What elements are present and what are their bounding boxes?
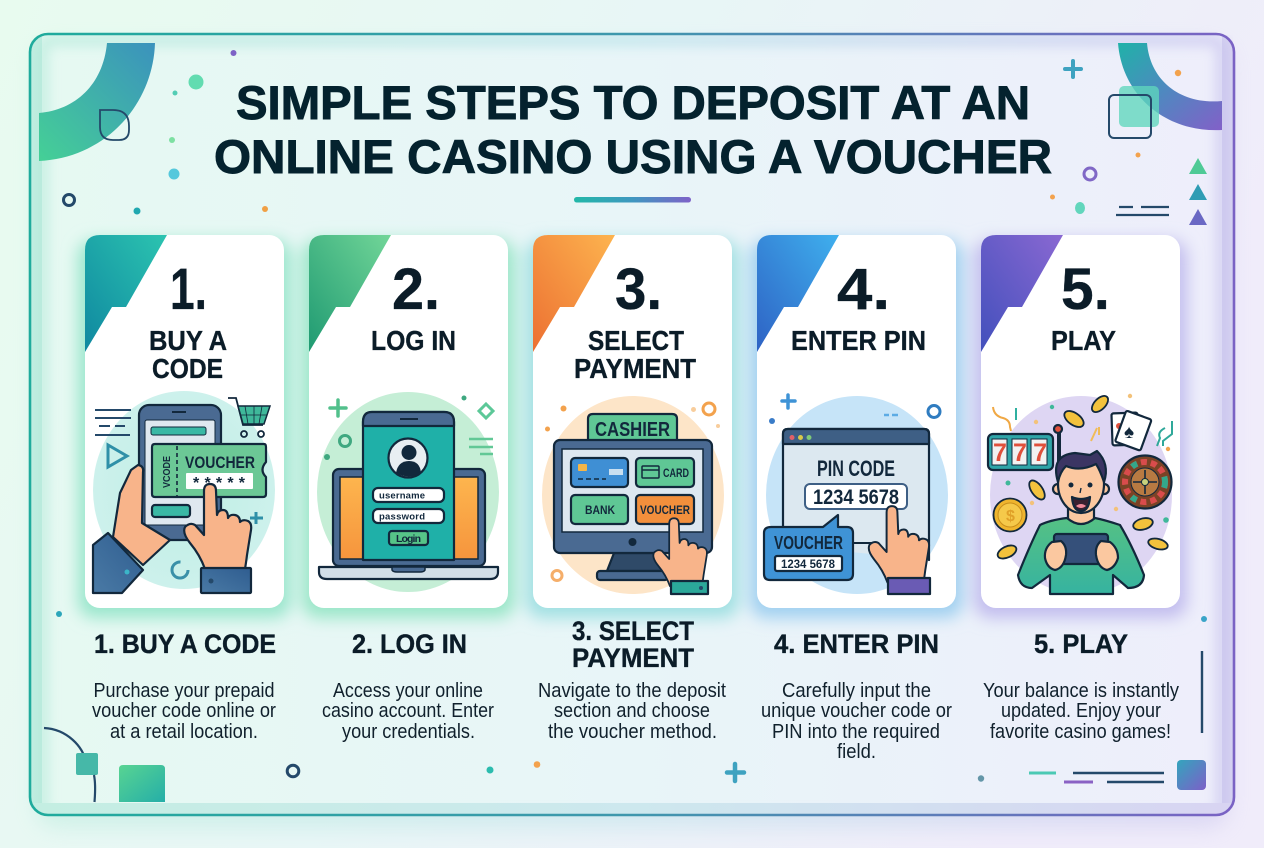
card 3: select payment (533, 235, 732, 608)
step 3 text: section and choose (554, 699, 710, 722)
step 4 text: PIN into the required (772, 720, 940, 743)
step number: 2. (392, 257, 440, 322)
illustration: cashier monitor: VOUCHER (640, 503, 690, 517)
gold coin (994, 498, 1026, 532)
illustration: cashier monitor: CARD (663, 468, 689, 480)
card heading: PLAY (1051, 325, 1116, 356)
step number: 5. (1061, 257, 1110, 322)
illustration: phone with voucher: VCODE (162, 456, 173, 488)
corner accent (981, 235, 1063, 352)
illustration: phone with voucher: VOUCHER (185, 453, 255, 472)
decorative shapes: top right (1050, 43, 1222, 225)
illustration: cashier monitor (542, 396, 724, 594)
corner accent (533, 235, 615, 352)
step 1 text: 1. BUY A CODE (94, 629, 276, 659)
illustration: pin entry: 1234 5678 (781, 557, 835, 571)
illustration: pin entry: PIN CODE (817, 456, 895, 481)
step 2 text: 2. LOG IN (352, 629, 467, 659)
roulette wheel (1118, 456, 1172, 508)
step 5 text: Your balance is instantly (983, 679, 1180, 702)
corner accent (757, 235, 839, 352)
title: SIMPLE STEPS TO DEPOSIT AT AN (236, 76, 1030, 129)
slot machine (988, 425, 1062, 470)
card 4: enter pin (757, 235, 956, 608)
illustration: pin entry: 1234 5678 (813, 486, 899, 509)
step 4 text: field. (837, 740, 876, 763)
step 2 text: your credentials. (342, 720, 475, 743)
step number: 4. (837, 257, 890, 322)
step 5 text (983, 629, 1180, 743)
corner accent (309, 235, 391, 352)
card heading (574, 325, 696, 384)
step 3 text: PAYMENT (572, 643, 694, 673)
slot machine: 777 (993, 439, 1047, 467)
card heading: ENTER PIN (791, 325, 926, 356)
step 5 text: 5. PLAY (1034, 629, 1128, 659)
playing cards (1111, 411, 1152, 451)
step 4 text: unique voucher code or (761, 699, 952, 722)
card heading (149, 325, 227, 384)
step 2 text: casino account. Enter (322, 699, 494, 722)
illustration: player with casino items (988, 393, 1172, 594)
illustration: login screen: Login (396, 533, 421, 545)
decorative shapes: bottom (44, 611, 1207, 802)
title underline (574, 197, 691, 202)
card heading: PAYMENT (574, 353, 696, 384)
step 1 text (92, 629, 276, 743)
step 1 text: voucher code online or (92, 699, 276, 722)
step number: 3. (615, 257, 662, 322)
step 5 text: updated. Enjoy your (1001, 699, 1161, 722)
card heading: SELECT (588, 325, 684, 356)
playing cards: ♠ (1124, 422, 1134, 443)
coins (996, 393, 1169, 561)
card heading: CODE (152, 353, 223, 384)
illustration: cashier monitor: BANK (585, 503, 615, 517)
illustration: login screen (317, 392, 499, 592)
illustration: cashier monitor: CASHIER (595, 419, 670, 441)
illustration: login screen: password (379, 512, 425, 522)
step number: 1. (170, 257, 207, 322)
step 1 text: Purchase your prepaid (94, 679, 274, 702)
card 5: play (981, 235, 1180, 608)
step 4 text: Carefully input the (782, 679, 931, 702)
card 1: buy a code (85, 235, 284, 608)
step 1 text: at a retail location. (110, 720, 258, 743)
illustration: phone with voucher (93, 391, 275, 593)
title (214, 76, 1052, 183)
step 3 text: the voucher method. (548, 720, 717, 743)
illustration: login screen: username (379, 490, 425, 502)
card shadows (78, 240, 1187, 618)
corner accent (85, 235, 167, 352)
step 4 text: 4. ENTER PIN (774, 629, 939, 659)
illustration: phone with voucher: ***** (193, 475, 246, 492)
man (1018, 451, 1144, 594)
illustration: pin entry: VOUCHER (774, 533, 843, 553)
step 4 text (761, 629, 952, 763)
decorative shapes: top left (39, 43, 268, 214)
illustration: pin entry (764, 395, 948, 594)
step 5 text: favorite casino games! (990, 720, 1171, 743)
step 3 text: Navigate to the deposit (538, 679, 726, 702)
card heading: BUY A (149, 325, 227, 356)
gold coin: $ (1006, 508, 1015, 525)
card heading: LOG IN (371, 325, 456, 356)
card 2: log in (309, 235, 508, 608)
step 3 text: 3. SELECT (572, 616, 694, 646)
step 2 text: Access your online (333, 679, 483, 702)
title: ONLINE CASINO USING A VOUCHER (214, 130, 1052, 183)
step 2 text (322, 629, 494, 743)
step 3 text (538, 616, 726, 743)
